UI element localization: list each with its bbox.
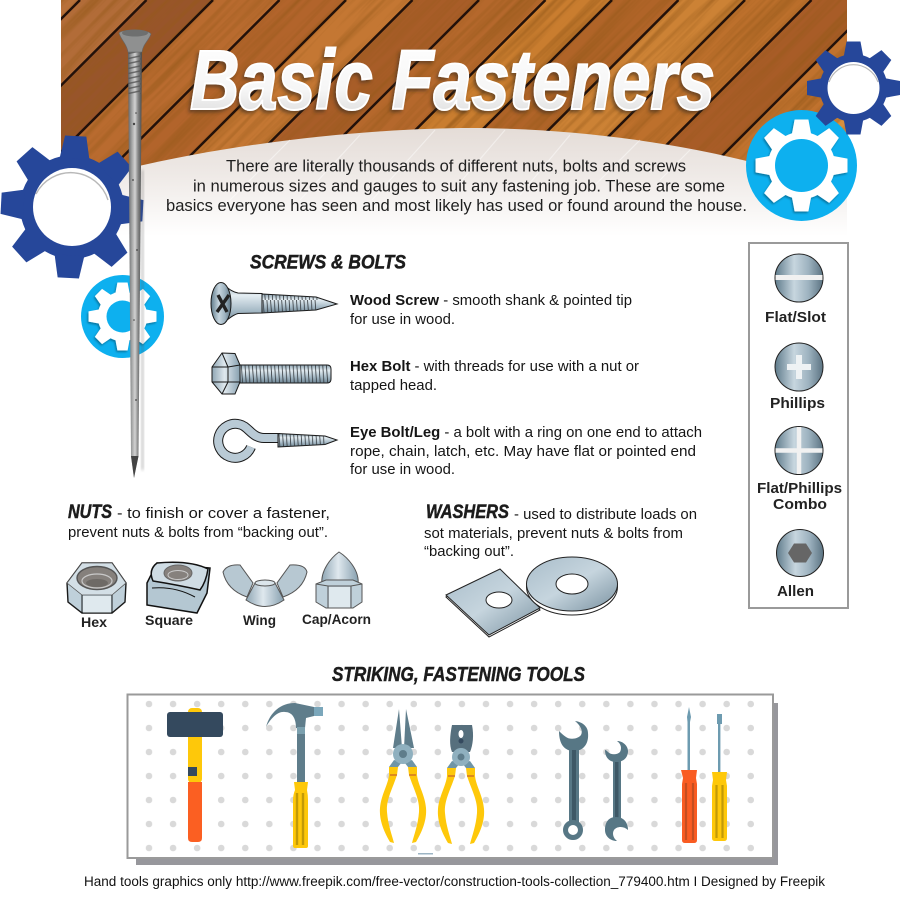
label: flat phillips combo: Flat/Phillips [757, 480, 842, 497]
icon: cutting pliers [438, 725, 484, 844]
text: eye bolt: Eye Bolt/Leg - a bolt with a ring on one end to attach [350, 424, 702, 441]
icon: square nut [147, 562, 210, 613]
icon: washers [446, 557, 618, 637]
text: washers [424, 501, 697, 560]
text: wood screw [350, 292, 632, 328]
icon: round washer [526, 557, 618, 615]
text: washers: “backing out”. [424, 543, 514, 560]
icon: blue gear top right [807, 42, 900, 134]
text: washers: sot materials, prevent nuts & bolts from [424, 525, 683, 542]
icon: needle nose pliers [380, 709, 426, 843]
icon: wing nut [223, 565, 307, 606]
label: phillips: Phillips [770, 395, 825, 412]
icon: orange screwdriver [681, 707, 697, 843]
icon: small cyan gear left [81, 275, 164, 358]
icon: flat phillips combo head [775, 426, 823, 474]
icon: large blue gear left [0, 132, 147, 282]
text: eye bolt [350, 424, 702, 478]
text: eye bolt: rope, chain, latch, etc. May have flat or pointed end [350, 443, 696, 460]
icon: flat slot head [775, 254, 823, 302]
intro text: in numerous sizes and gauges to suit any fastening job. These are some [193, 178, 725, 196]
heading: screws and bolts: SCREWS & BOLTS [250, 252, 406, 274]
icon: mallet [167, 708, 223, 842]
label: square: Square [145, 612, 193, 628]
text: eye bolt: for use in wood. [350, 461, 455, 478]
icon: hex bolt [212, 353, 331, 394]
footer credit: Hand tools graphics only http://www.freepik.com/free-vector/construction-tools-collection_779400.htm I Designed by Freepik [84, 874, 825, 889]
icon: yellow screwdriver [712, 714, 727, 841]
heading: striking fastening tools: STRIKING, FASTENING TOOLS [332, 664, 586, 686]
title: Basic Fasteners [190, 33, 715, 127]
text: hex bolt: tapped head. [350, 377, 437, 394]
text: washers: - used to distribute loads on [514, 506, 697, 523]
text: washers: WASHERS [426, 501, 509, 523]
label: hex: Hex [81, 614, 107, 630]
text: wood screw: for use in wood. [350, 311, 455, 328]
panel: screw head types [749, 243, 848, 608]
icon: claw hammer [266, 703, 323, 848]
label: cap acorn: Cap/Acorn [302, 611, 371, 627]
intro text: There are literally thousands of different nuts, bolts and screws [226, 158, 686, 176]
icon: cyan gear top right [746, 110, 857, 221]
label: allen: Allen [777, 583, 814, 600]
icon: small wrench [605, 741, 628, 841]
intro text [166, 158, 747, 215]
text: nuts: NUTS [68, 501, 112, 523]
text: hex bolt: Hex Bolt - with threads for use with a nut or [350, 358, 639, 375]
label: flat phillips combo: Combo [773, 496, 827, 513]
icon: square washer [446, 569, 540, 637]
header wood panel [61, 0, 847, 216]
icon: large wrench [559, 721, 588, 838]
label: flat slot: Flat/Slot [765, 309, 826, 326]
intro text: basics everyone has seen and most likely has used or found around the house. [166, 197, 747, 215]
text: wood screw: Wood Screw - smooth shank & pointed tip [350, 292, 632, 309]
icon: cap acorn nut [316, 552, 362, 608]
icon: wood screw [211, 282, 337, 324]
icon: phillips head [775, 343, 823, 391]
icon: allen head [776, 530, 824, 576]
label: flat phillips combo [757, 480, 842, 513]
nail [119, 30, 151, 478]
panel: tool pegboard [128, 694, 778, 865]
text: nuts [68, 501, 330, 541]
label: wing: Wing [243, 612, 276, 628]
text: nuts: - to finish or cover a fastener, [117, 505, 330, 522]
icon: eye bolt [218, 424, 337, 458]
text: hex bolt [350, 358, 639, 394]
icon: hex nut [67, 563, 126, 613]
text: nuts: prevent nuts & bolts from “backing out”. [68, 524, 328, 541]
